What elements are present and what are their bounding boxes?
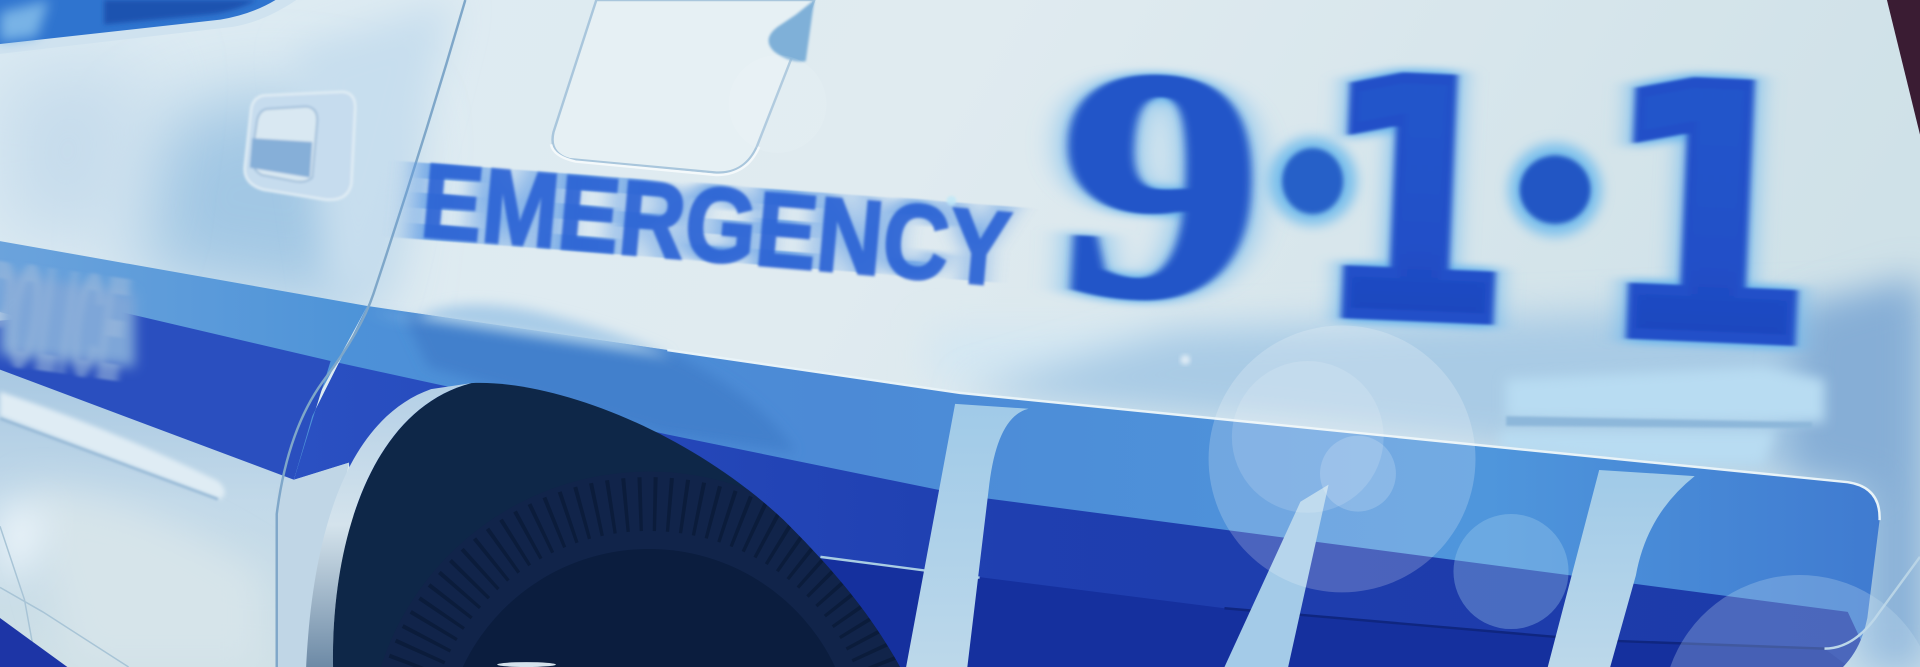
panel crease highlight (667, 350, 1880, 520)
right side reflection on rear quarter (960, 275, 1920, 667)
light blue stripe (276, 294, 1892, 667)
emergency lettering (402, 142, 1015, 309)
tire sidewall (463, 549, 835, 667)
rear quarter panel (276, 294, 1892, 667)
9-1-1 number (1049, 0, 1826, 423)
door trim moulding (0, 392, 225, 499)
numeral 9: 9 (1049, 0, 1272, 371)
emergency motion trail: EMERGENCY (402, 142, 1013, 304)
dark blue stripe (294, 361, 1873, 667)
tire tread (414, 504, 884, 667)
numeral 9: 9 (1049, 0, 1272, 371)
lower sill seam (0, 526, 129, 667)
door handle (245, 92, 355, 200)
door shading (0, 0, 453, 312)
vertical reflection bars (906, 404, 1695, 667)
dark background at top right corner (1887, 0, 1920, 135)
lens flares (729, 55, 1920, 667)
numeral 1: 1 (1310, 9, 1521, 397)
fuel door latch (769, 0, 814, 62)
wheel well (332, 382, 900, 667)
tire (747, 489, 900, 667)
emergency text: EMERGENCY (417, 142, 1015, 309)
lower body crease (820, 557, 1920, 649)
numeral 1: 1 (1591, 9, 1826, 423)
side window (0, 0, 296, 54)
bottom left sill (0, 618, 67, 667)
fuel door (551, 0, 814, 175)
rim glint (497, 662, 556, 667)
door blue stripes (0, 241, 367, 480)
lower door panel (0, 367, 294, 667)
wheel arch and tire (332, 382, 900, 667)
numeral 1: 1 (1591, 9, 1826, 423)
numeral 1: 1 (1310, 9, 1521, 397)
first dot (1269, 137, 1357, 225)
wheel arch highlight (306, 383, 471, 667)
wheel arch shadow (409, 312, 782, 446)
reflection dome above stripe (367, 305, 671, 357)
second dot (1509, 143, 1602, 236)
lower dark panel (820, 557, 1849, 667)
door seam (277, 0, 465, 667)
fender below stripe (277, 463, 349, 667)
